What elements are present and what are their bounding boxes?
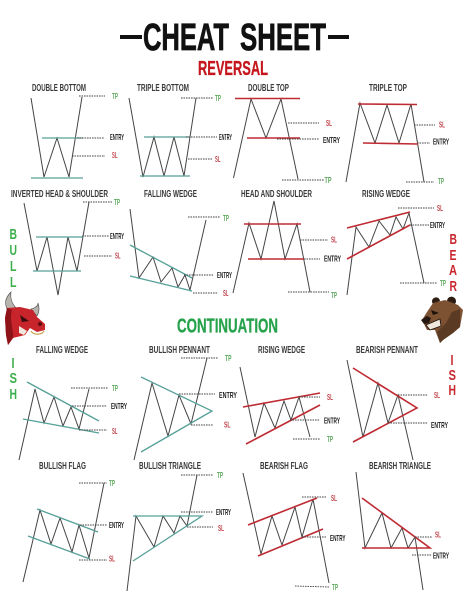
panel title: TRIPLE TOP [369, 83, 407, 94]
panel: bullish pennant [134, 345, 237, 460]
title: SHEET [240, 17, 326, 59]
panel: rising wedge reversal [347, 189, 446, 295]
level labels: ENTRY [324, 416, 340, 426]
resistance and neckline [358, 104, 418, 144]
panel: head and shoulder [233, 189, 341, 300]
heading: reversal: REVERSAL [198, 58, 268, 80]
level labels: SL [437, 203, 443, 213]
title [120, 17, 349, 59]
level labels [433, 530, 449, 560]
price path [347, 213, 424, 295]
side label: bullish: S [10, 370, 17, 387]
level lines [82, 202, 112, 256]
level labels [430, 203, 446, 288]
price path [127, 475, 197, 591]
panel: triple top [346, 83, 449, 186]
price path [240, 367, 310, 437]
level labels: ENTRY [324, 254, 341, 264]
text: ENTRY [110, 231, 124, 241]
side label: bullish [10, 226, 17, 403]
price path [19, 389, 89, 460]
level labels [110, 91, 124, 160]
level labels: SL [435, 530, 441, 540]
side label: bearish: S [448, 367, 456, 384]
panel title: FALLING WEDGE [36, 345, 88, 356]
panel: bullish flag [23, 461, 124, 582]
level labels: TP [109, 478, 115, 488]
level labels: TP [440, 278, 446, 288]
level labels: TP [217, 470, 223, 480]
panel: falling wedge reversal [130, 189, 232, 298]
panel title: FALLING WEDGE [144, 189, 197, 200]
panel title: BULLISH FLAG [39, 461, 86, 472]
panel: falling wedge continuation [19, 345, 127, 460]
level labels: ENTRY [109, 520, 124, 530]
flag lines [28, 509, 98, 559]
price path [129, 98, 196, 177]
level labels: TP [324, 175, 332, 185]
wedge lines [23, 382, 99, 433]
level labels: TP [112, 91, 118, 101]
panel title: DOUBLE BOTTOM [32, 83, 86, 94]
level labels [330, 493, 346, 592]
panel title: BEARISH PENNANT [356, 345, 418, 356]
panel: bearish flag [243, 461, 346, 592]
icon: bull head [5, 292, 45, 345]
level labels [109, 478, 124, 564]
support and neckline [140, 137, 190, 176]
side label: bullish: I [12, 355, 14, 372]
level labels: SL [434, 390, 440, 400]
side label: bullish: U [10, 242, 17, 259]
level labels: SL [327, 392, 333, 402]
level labels: TP [112, 383, 118, 393]
panel title: HEAD AND SHOULDER [241, 189, 312, 200]
level lines [412, 537, 432, 555]
level labels: ENTRY [433, 136, 449, 146]
price path [356, 472, 423, 590]
level labels: ENTRY [330, 533, 346, 543]
panel title: RISING WEDGE [258, 345, 305, 356]
panel: triple bottom [129, 83, 232, 177]
level labels [111, 383, 127, 436]
level lines [181, 475, 213, 527]
panel title: TRIPLE BOTTOM [137, 83, 189, 94]
resistance and neckline [244, 224, 304, 259]
level labels: TP [114, 197, 120, 207]
title: CHEAT [143, 17, 229, 59]
panel: inverted head and shoulder [11, 189, 124, 295]
wedge lines [347, 212, 410, 259]
panel title: INVERTED HEAD & SHOULDER [11, 189, 108, 200]
support and neckline [31, 138, 83, 178]
panel: bearish triangle [356, 461, 449, 590]
level labels: ENTRY [216, 507, 231, 517]
price path [130, 209, 206, 290]
text: ENTRY [110, 132, 124, 142]
wedge lines [243, 393, 320, 444]
level labels: SL [439, 120, 445, 130]
level labels: ENTRY [431, 420, 448, 430]
level labels: ENTRY [323, 135, 340, 145]
level labels: TP [332, 582, 338, 592]
panel title: BEARISH TRIANGLE [369, 461, 431, 472]
level labels [216, 470, 231, 533]
price path [134, 358, 207, 460]
flag lines [248, 498, 323, 556]
panel title: BULLISH PENNANT [149, 345, 210, 356]
price path [347, 360, 413, 460]
price path [23, 483, 104, 582]
level lines [179, 358, 218, 425]
level labels: TP [438, 176, 444, 186]
price path [24, 202, 89, 295]
triangle lines [133, 516, 202, 561]
price path [234, 99, 298, 179]
level labels: SL [115, 250, 120, 260]
level labels: SL [112, 426, 118, 436]
icon: bear head [421, 297, 463, 343]
side label: bullish: H [10, 386, 17, 403]
price path [243, 473, 329, 583]
level labels [217, 213, 232, 298]
level labels [215, 93, 232, 164]
panel: double top [234, 83, 340, 185]
side label: bearish: A [449, 262, 457, 279]
level labels: TP [223, 213, 229, 223]
level labels [324, 392, 340, 444]
panel: bullish triangle [127, 461, 231, 591]
level labels: ENTRY [430, 220, 445, 230]
level labels [324, 234, 341, 300]
level lines [71, 388, 108, 430]
level labels: TP [327, 434, 333, 444]
level lines [398, 208, 437, 283]
text: ENTRY [219, 132, 232, 142]
side label: bullish: L [10, 258, 16, 275]
side label: bearish: E [450, 247, 456, 264]
level labels: SL [331, 493, 337, 503]
level lines [181, 98, 217, 159]
level labels: SL [109, 554, 115, 564]
level labels: SL [223, 288, 228, 298]
level lines [79, 483, 107, 560]
price path [346, 103, 424, 182]
level lines [184, 217, 220, 293]
level labels: SL [224, 420, 230, 430]
panel title: RISING WEDGE [362, 189, 410, 200]
level labels: ENTRY [111, 401, 127, 411]
level labels [433, 120, 449, 186]
level labels [219, 353, 237, 430]
panel: double bottom [31, 83, 124, 178]
triangle lines [362, 498, 430, 548]
level labels: SL [218, 523, 224, 533]
level labels: ENTRY [217, 270, 232, 280]
resistance and neckline [235, 98, 300, 138]
level lines [388, 395, 428, 423]
wedge lines [130, 245, 192, 291]
side label: bearish: H [448, 382, 456, 399]
pennant lines [141, 377, 212, 452]
level lines [72, 96, 105, 156]
pennant lines [353, 368, 417, 442]
side label: bearish [448, 231, 457, 399]
level labels [323, 118, 340, 185]
level labels: SL [112, 150, 118, 160]
side label: bearish: R [450, 278, 457, 295]
level labels: TP [225, 353, 232, 363]
side label: bearish: I [450, 352, 454, 369]
price path [233, 201, 310, 293]
heading: continuation: CONTINUATION [177, 316, 278, 338]
panel title: BEARISH FLAG [260, 461, 308, 472]
level lines [288, 240, 329, 292]
support and neckline [33, 237, 83, 271]
level labels: SL [331, 234, 337, 244]
side label: bullish: B [10, 226, 17, 243]
side label: bullish: L [10, 274, 16, 291]
price path [31, 97, 82, 177]
level lines [277, 123, 324, 180]
level labels: TP [331, 290, 337, 300]
level labels: TP [215, 93, 221, 103]
level lines [295, 497, 329, 587]
level labels: SL [215, 154, 220, 164]
level labels: SL [326, 118, 332, 128]
level labels [431, 390, 448, 430]
level labels: ENTRY [219, 390, 237, 400]
panel: rising wedge continuation [240, 345, 340, 444]
panel title: BULLISH TRIANGLE [139, 461, 201, 472]
panel: bearish pennant [347, 345, 448, 460]
panel title: DOUBLE TOP [248, 83, 289, 94]
level labels [110, 197, 124, 260]
level lines [406, 125, 435, 182]
level lines [290, 397, 320, 439]
level labels: ENTRY [433, 550, 449, 560]
side label: bearish: B [450, 231, 457, 248]
